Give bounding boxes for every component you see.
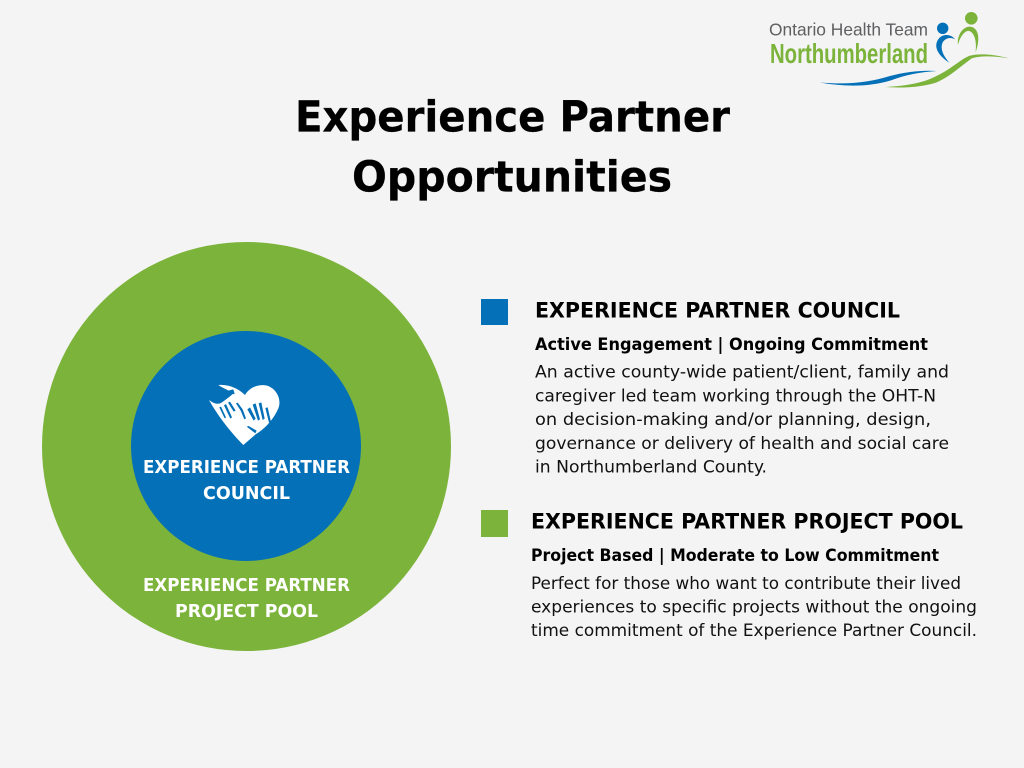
title: [295, 94, 730, 202]
swatch: blue square: [481, 299, 508, 325]
description: project pool: time commitment of the Experience Partner Council.: [531, 621, 977, 641]
description: council: in Northumberland County.: [535, 458, 767, 478]
swatch: green square: [481, 510, 508, 537]
label: project pool: PROJECT POOL: [175, 602, 318, 622]
description: project pool: Perfect for those who want to contribute their lived: [531, 574, 961, 594]
legend: experience partner council: [481, 298, 949, 478]
subheading: project pool commitment: Project Based | Moderate to Low Commitment: [531, 546, 939, 566]
logo: Ontario Health Team Northumberland: Northumberland: [770, 38, 928, 69]
inner circle: council: [131, 331, 361, 561]
description: council: An active county-wide patient/client, family and: [535, 363, 949, 383]
logo: Ontario Health Team Northumberland: [769, 12, 1009, 87]
icon: heart with hands: [209, 385, 279, 445]
diagram: nested circles: [42, 242, 451, 651]
label: council: [143, 458, 350, 504]
label: council: COUNCIL: [203, 484, 290, 504]
description: project pool: experiences to specific projects without the ongoing: [531, 598, 977, 618]
description: council: caregiver led team working through the OHT-N: [535, 386, 936, 406]
legend: experience partner project pool: [481, 510, 977, 641]
description: project pool: [531, 574, 977, 641]
logo: Ontario Health Team Northumberland: Ontario Health Team: [769, 20, 928, 40]
description: council: on decision-making and/or planning, design,: [535, 410, 931, 430]
heading: council: EXPERIENCE PARTNER COUNCIL: [535, 298, 900, 322]
description: council: [535, 363, 949, 478]
label: project pool: [143, 576, 350, 622]
heading: project pool: EXPERIENCE PARTNER PROJECT POOL: [531, 510, 963, 534]
title: Opportunities: [352, 154, 672, 202]
description: council: governance or delivery of health and social care: [535, 434, 949, 454]
label: project pool: EXPERIENCE PARTNER: [143, 576, 350, 596]
label: council: EXPERIENCE PARTNER: [143, 458, 350, 478]
outer circle: project pool: [42, 242, 451, 651]
title: Experience Partner: [295, 94, 730, 142]
subheading: council commitment: Active Engagement | Ongoing Commitment: [535, 335, 928, 355]
